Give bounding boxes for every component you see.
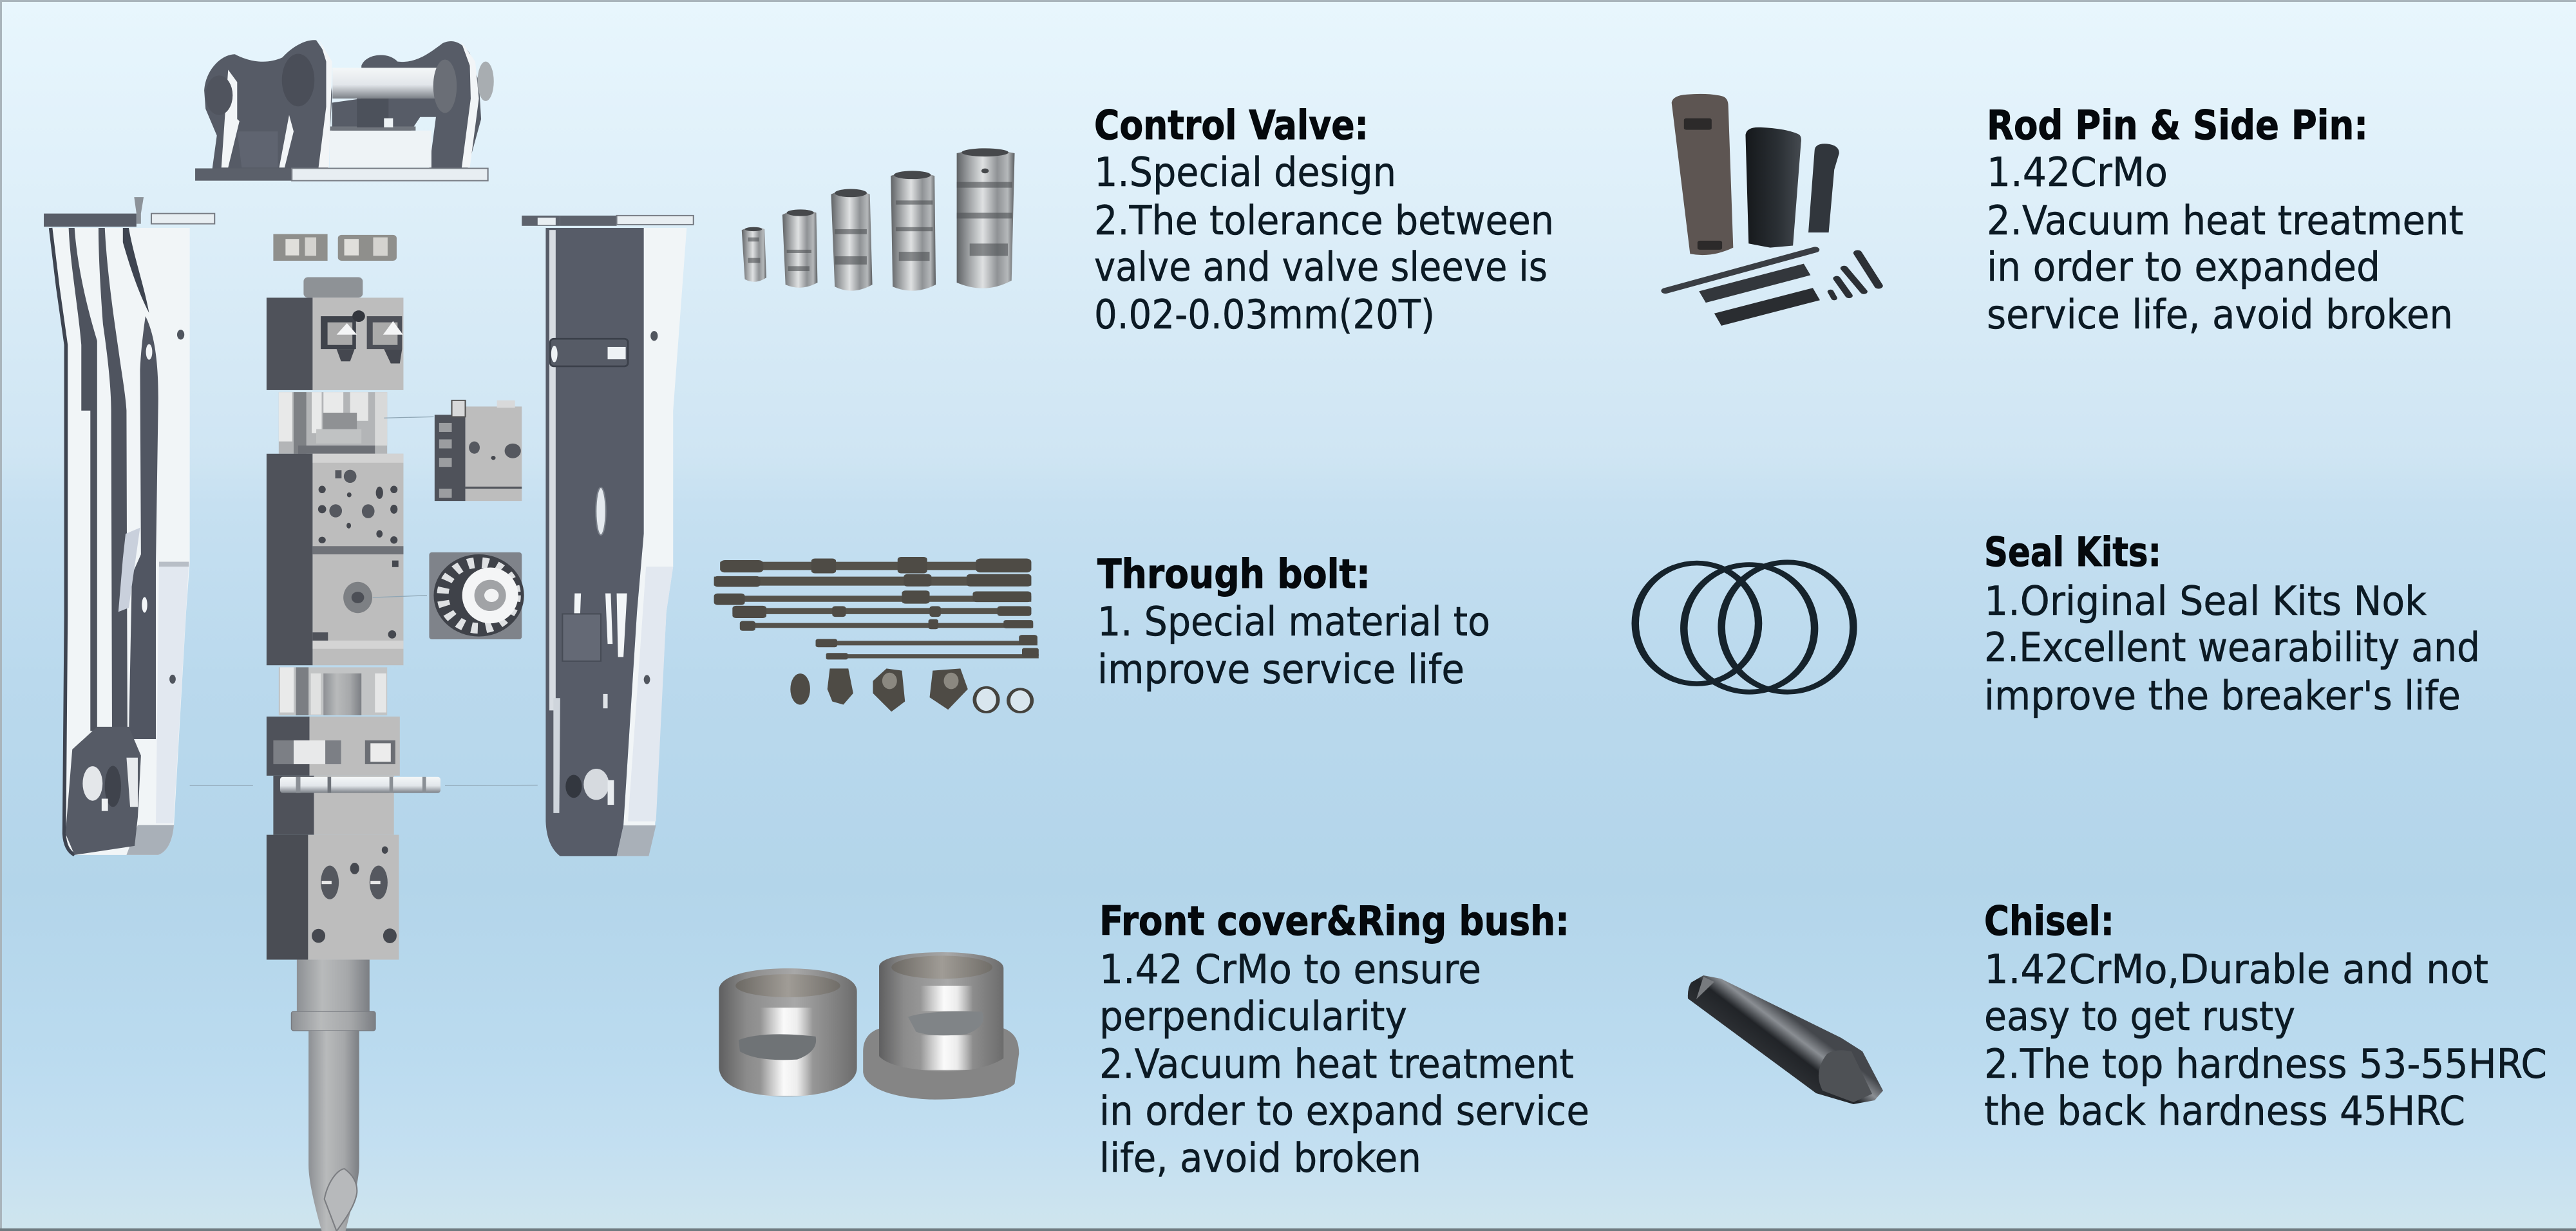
text: rod pin details bbox=[1987, 149, 2463, 338]
panel: rod pin and side pin bbox=[1665, 94, 2463, 338]
text: control valve details bbox=[1094, 149, 1554, 338]
heading: control valve: Control Valve: bbox=[1094, 102, 1368, 149]
heading: chisel: Chisel: bbox=[1984, 897, 2114, 944]
text: rod pin details: 1.42CrMo bbox=[1987, 149, 2168, 196]
icon: seal rings bbox=[1635, 562, 1853, 692]
text: through bolt details bbox=[1097, 598, 1490, 693]
icon: chisel bbox=[1688, 975, 1883, 1104]
front cover collar bbox=[291, 960, 375, 1031]
upper cylinder block bbox=[267, 297, 403, 390]
text: front cover details bbox=[1099, 946, 1589, 1181]
icon: control valve cylinders bbox=[742, 148, 1015, 291]
panel: chisel bbox=[1688, 897, 2547, 1134]
right side plate bbox=[522, 216, 694, 856]
text: chisel details: the back hardness 45HRC bbox=[1984, 1087, 2465, 1134]
left side plate bbox=[44, 197, 214, 855]
alignment lines bbox=[190, 417, 538, 785]
panel: control valve bbox=[742, 102, 1554, 338]
text: control valve details: 2.The tolerance between bbox=[1094, 197, 1554, 244]
text: control valve details: 1.Special design bbox=[1094, 149, 1396, 196]
text: seal kits details: 2.Excellent wearability and bbox=[1984, 624, 2480, 671]
heading: front cover and ring bush: Front cover&Ring bush: bbox=[1099, 897, 1569, 944]
exploded breaker diagram bbox=[44, 40, 694, 1231]
icon: rod pins bbox=[1665, 94, 1879, 319]
panel: seal kits bbox=[1635, 529, 2480, 719]
front head block bbox=[267, 717, 400, 776]
text: chisel details bbox=[1984, 946, 2547, 1134]
top mounting bracket bbox=[195, 40, 494, 181]
lower piston section bbox=[279, 667, 387, 715]
text: chisel details: 1.42CrMo,Durable and not bbox=[1984, 946, 2488, 993]
upper piston section bbox=[279, 392, 387, 454]
text: front cover details: 2.Vacuum heat treatment bbox=[1099, 1040, 1574, 1087]
text: rod pin details: 2.Vacuum heat treatment bbox=[1987, 197, 2463, 244]
panel: through bolt bbox=[714, 550, 1490, 712]
text: rod pin details: service life, avoid broken bbox=[1987, 291, 2453, 338]
panel: front cover and ring bush bbox=[719, 897, 1589, 1181]
gear plate bbox=[429, 552, 524, 639]
text: chisel details: 2.The top hardness 53-55HRC bbox=[1984, 1040, 2547, 1087]
text: front cover details: in order to expand service bbox=[1099, 1087, 1589, 1134]
chisel tip bbox=[308, 1031, 359, 1231]
text: control valve details: valve and valve sleeve is bbox=[1094, 243, 1548, 290]
center breaker body bbox=[267, 234, 440, 1231]
icon: front cover and ring bush bbox=[719, 952, 1019, 1100]
text: seal kits details: improve the breaker's life bbox=[1984, 672, 2461, 719]
cap bbox=[303, 277, 363, 297]
heading: seal kits: Seal Kits: bbox=[1984, 529, 2161, 576]
heading: through bolt: Through bolt: bbox=[1097, 550, 1370, 597]
text: through bolt details: 1. Special material to bbox=[1097, 598, 1490, 645]
text: front cover details: 1.42 CrMo to ensure bbox=[1099, 946, 1481, 993]
side valve block bbox=[435, 400, 522, 501]
text: chisel details: easy to get rusty bbox=[1984, 993, 2295, 1040]
text: seal kits details: 1.Original Seal Kits Nok bbox=[1984, 578, 2427, 625]
text: control valve details: 0.02-0.03mm(20T) bbox=[1094, 291, 1435, 338]
text: seal kits details bbox=[1984, 578, 2480, 719]
lower body block bbox=[267, 776, 399, 960]
text: front cover details: perpendicularity bbox=[1099, 993, 1407, 1040]
main cylinder block bbox=[267, 454, 403, 665]
top spacers bbox=[273, 234, 397, 261]
cross pin bbox=[280, 777, 440, 793]
text: rod pin details: in order to expanded bbox=[1987, 243, 2380, 290]
text: through bolt details: improve service life bbox=[1097, 646, 1464, 693]
text: front cover details: life, avoid broken bbox=[1099, 1134, 1421, 1181]
heading: rod pin and side pin: Rod Pin & Side Pin: bbox=[1987, 102, 2368, 149]
icon: through bolts bbox=[714, 557, 1039, 712]
